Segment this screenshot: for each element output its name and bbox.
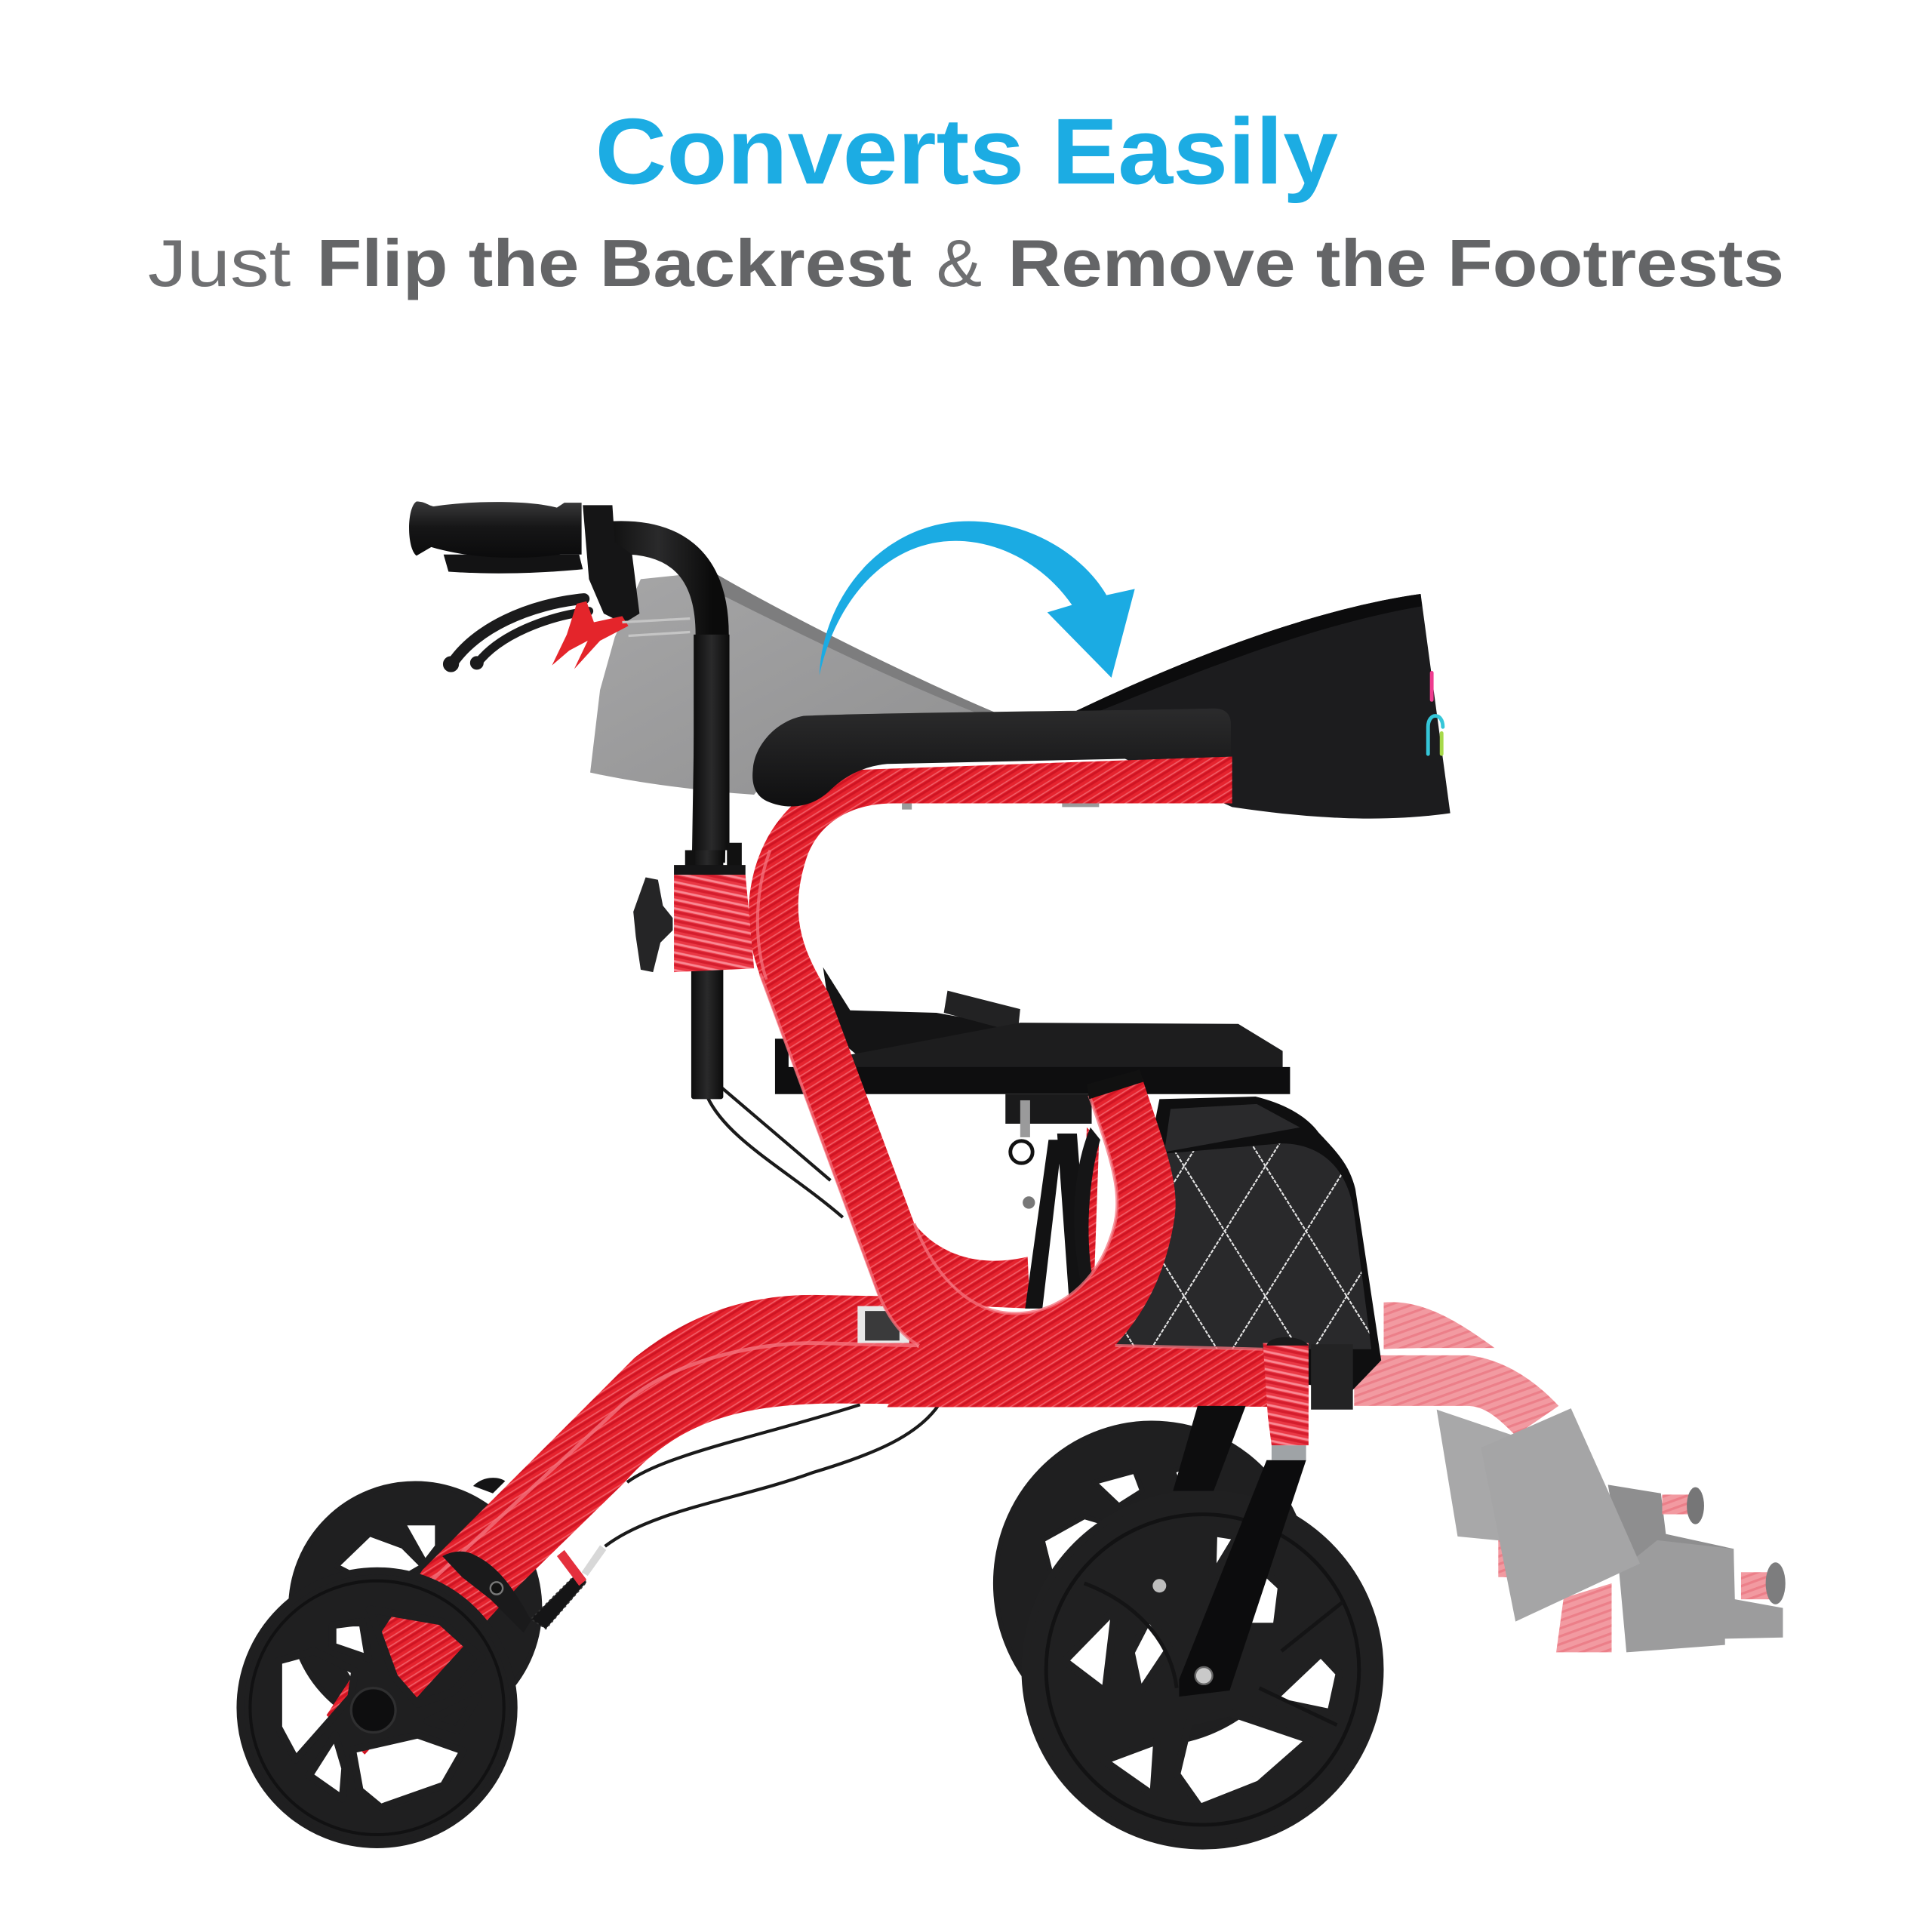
tyre ring	[250, 1581, 504, 1835]
grip and brake	[409, 501, 690, 672]
title: Converts Easily	[595, 100, 1338, 204]
clamp with knob	[633, 843, 754, 972]
silver cable	[622, 619, 690, 635]
hinge hardware	[1005, 1094, 1092, 1209]
ghost backrest: upright position	[590, 572, 995, 795]
black cross tubes	[1025, 1134, 1089, 1309]
ghost front pad	[1481, 1408, 1640, 1622]
tube highlight	[431, 1343, 919, 1581]
main S frame	[749, 756, 1232, 1407]
rear fork strip	[1173, 1406, 1246, 1491]
wheel edge behind frame	[1074, 1128, 1100, 1294]
brake levers	[444, 598, 589, 672]
frame highlights	[758, 851, 1263, 1349]
bag stitching	[1125, 1143, 1370, 1349]
seat	[775, 968, 1290, 1094]
fold bracket	[857, 1306, 909, 1343]
front big wheel	[1025, 1494, 1380, 1846]
handlebar tube	[604, 537, 730, 1099]
ghost rear footplate and peg	[1608, 1484, 1734, 1589]
rear caster fork and spring	[473, 1478, 606, 1629]
subtitle: Remove the Footrests	[1008, 226, 1784, 300]
front caster wheel	[240, 1571, 514, 1844]
seat base	[775, 1038, 1290, 1094]
brake shoe	[442, 1552, 531, 1632]
wheel axle frame and main red frame leg	[327, 1295, 1309, 1755]
brake body	[583, 505, 639, 623]
quilted storage bag	[1115, 1097, 1381, 1390]
cable bracket and ferrule	[557, 1550, 586, 1586]
pink caster tube and end cap	[1263, 1337, 1353, 1445]
ghost front peg	[1741, 1562, 1786, 1604]
front fork strip	[1179, 1460, 1306, 1697]
tyre inner ring	[1046, 1515, 1359, 1825]
front fork	[1152, 1406, 1306, 1697]
folding mechanism	[914, 1094, 1100, 1309]
flipped backrest	[1066, 594, 1451, 819]
silver collar	[1272, 1445, 1306, 1460]
hub	[351, 1688, 395, 1733]
rear grip	[444, 555, 583, 574]
knob	[633, 877, 672, 972]
brake cables	[605, 1088, 939, 1546]
ghost lower tube	[1354, 1355, 1558, 1435]
ghost lower leg	[1498, 1540, 1612, 1652]
rear small wheel	[291, 1484, 540, 1733]
arm pad	[752, 709, 1231, 807]
seat strap and buckle	[823, 968, 1020, 1060]
arrow: flip direction	[820, 521, 1135, 678]
second bolt	[1152, 1579, 1166, 1592]
ghost front footplate	[1619, 1540, 1783, 1652]
spoke ribs	[1084, 1583, 1343, 1725]
seat cushion	[851, 1023, 1283, 1072]
ghost rear pad	[1437, 1410, 1521, 1543]
subtitle	[148, 226, 1784, 300]
front grip	[409, 501, 582, 558]
logo fragment on backrest	[1428, 672, 1443, 754]
red brake release	[552, 601, 629, 669]
spring bellows	[531, 1574, 586, 1629]
subtitle: Flip the Backrest	[317, 226, 912, 300]
subtitle: &	[937, 226, 982, 300]
ghost footrest	[1354, 1302, 1786, 1652]
rear big wheel	[995, 1423, 1309, 1743]
seat latch cap	[1087, 1069, 1143, 1099]
arm rivets	[902, 803, 1099, 810]
rear frame red section	[914, 1128, 1099, 1309]
ghost upper tube	[1383, 1302, 1494, 1349]
subtitle: Just	[148, 226, 291, 300]
top brake mount	[473, 1478, 505, 1494]
axle bolt	[1195, 1667, 1213, 1684]
